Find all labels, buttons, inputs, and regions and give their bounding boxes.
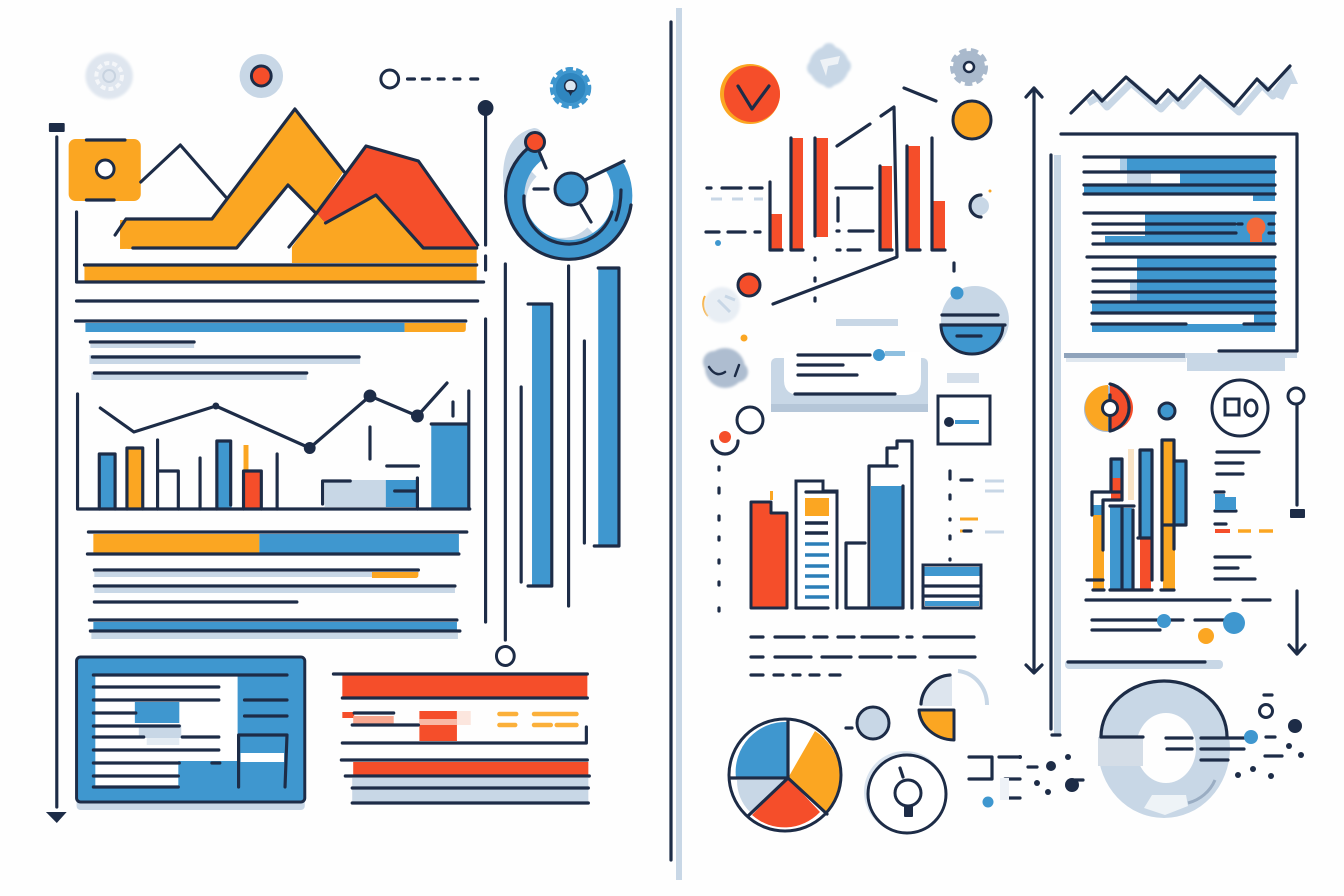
second orange peak: [289, 195, 477, 263]
card with text lines: [771, 349, 928, 412]
partial ring: [970, 190, 992, 217]
blue ring: [515, 152, 623, 250]
blue table card: [77, 657, 305, 810]
outline mountain: [141, 145, 226, 197]
buildings bar chart: [751, 441, 981, 608]
key box: [938, 396, 990, 444]
pin line: [478, 100, 493, 622]
pale block: [947, 373, 979, 383]
frame: [1061, 134, 1297, 351]
pale inner crescent: [520, 172, 592, 244]
orange peak: [115, 109, 344, 249]
orange dot: [740, 334, 748, 342]
icon: red dot badge: [240, 54, 283, 98]
striped building: [796, 481, 837, 608]
quarter gauge: [919, 671, 987, 740]
baseline: [78, 394, 470, 509]
mountain area chart: [77, 109, 484, 282]
red bar chart: [770, 88, 945, 304]
mini text lines: [1215, 452, 1273, 579]
table panel: [1061, 134, 1297, 371]
icon: grey gear: [953, 51, 985, 83]
spokes: [534, 142, 624, 222]
icon: red dot with blob: [703, 274, 760, 323]
table rows 3: [1087, 257, 1275, 332]
left axis arrow: [46, 123, 67, 823]
icon: red check badge: [720, 64, 780, 124]
bracket and dots left of ring: [969, 754, 1083, 808]
blue dot: [1159, 403, 1175, 419]
red peak: [317, 146, 478, 248]
gauge donut: [503, 128, 631, 259]
stacked progress bar: [87, 532, 467, 554]
helmet icon: [941, 286, 1009, 354]
lightbulb dial: [864, 751, 946, 833]
ring with red dot: [712, 407, 763, 454]
icon: blue gear: [553, 70, 588, 106]
orange base band: [84, 264, 477, 282]
red marker: [526, 132, 544, 152]
connector: ring and dashes: [381, 70, 478, 88]
red table card: [333, 674, 589, 803]
icon: grey blob: [807, 43, 851, 88]
panel: right dashboard: [703, 43, 1305, 833]
shapes badge: [1212, 380, 1268, 436]
text lines block 1: [76, 301, 478, 380]
bars: [99, 391, 469, 509]
scattered dots right of ring: [1235, 695, 1304, 779]
centre divider: [671, 8, 682, 880]
small table: [923, 565, 981, 608]
caption bar: [1065, 660, 1223, 669]
icon: orange circle: [953, 101, 991, 139]
up down arrow: [1026, 88, 1042, 673]
stacked bars chart: [1087, 440, 1186, 590]
table rows 1: [1084, 157, 1275, 201]
zigzag sparkline: [1071, 66, 1298, 113]
pale bar: [836, 319, 898, 326]
axis and legend dots: [1086, 600, 1270, 644]
panel: left dashboard: [46, 53, 619, 823]
icon: orange tile: [69, 139, 141, 201]
right pin line: [1288, 388, 1305, 518]
shadow: [1064, 353, 1297, 371]
tall building: [846, 441, 912, 608]
table rows 2: [1084, 213, 1275, 244]
long side rule: [1051, 155, 1061, 735]
red building: [751, 491, 787, 608]
legend dashes: [950, 471, 1004, 560]
small donut: [1084, 384, 1133, 432]
right down arrow: [1289, 591, 1305, 654]
hub: [555, 173, 587, 205]
big pale ring: [1098, 681, 1245, 818]
combo chart: [78, 383, 470, 509]
pie chart: [728, 718, 842, 832]
small pale circle: [846, 707, 889, 739]
trend line: [100, 383, 447, 454]
text lines block 2: [89, 570, 460, 639]
pale halo: [503, 128, 546, 205]
dotted vertical: [717, 467, 721, 611]
icon: grey badge: [85, 53, 133, 99]
chart axis: [77, 212, 484, 282]
chart side dashes: [706, 188, 954, 301]
icon: dark blob: [703, 348, 748, 388]
text dashes under buildings: [751, 637, 975, 675]
vertical bars: [496, 264, 619, 666]
ring outlines: [506, 143, 631, 259]
